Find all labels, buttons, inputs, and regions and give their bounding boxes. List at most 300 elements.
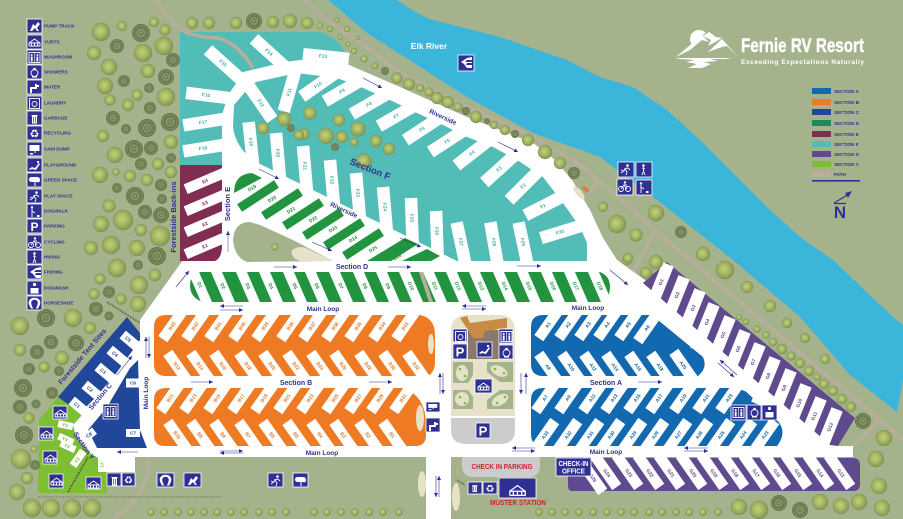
B stalls upper: B32 <box>410 361 421 372</box>
C stalls: C2 <box>85 385 94 394</box>
E stalls <box>184 166 231 259</box>
E stalls: E1 <box>201 243 209 251</box>
F stalls: F30 <box>555 228 565 237</box>
D labels: D14 <box>500 281 509 292</box>
legend item: parking: P <box>30 220 39 234</box>
D labels <box>195 281 604 292</box>
A stalls lower: A23 <box>761 430 771 441</box>
panel: Section C <box>58 317 147 448</box>
blue block <box>531 388 782 446</box>
B stalls upper: B22 <box>290 361 301 372</box>
F stalls: F13 <box>318 53 328 60</box>
B stalls upper: B14 <box>194 361 205 372</box>
G lower stalls: G23 <box>623 468 634 479</box>
legend item: pump track <box>27 19 75 33</box>
F stalls: F7 <box>392 112 401 121</box>
B stalls lower: B27 <box>354 393 364 404</box>
panel: Section D lower row <box>188 272 612 302</box>
B stalls upper: B24 <box>314 361 325 372</box>
legend item: washroom <box>27 50 72 64</box>
F stalls: F1 <box>539 203 547 211</box>
G stalls: G1 <box>658 278 666 286</box>
A stalls lower: A32 <box>564 430 574 441</box>
G lower stalls: G18 <box>729 468 740 479</box>
icon: pump track <box>184 473 201 487</box>
panel: Section G diagonal <box>643 262 855 457</box>
icon: showers east <box>747 405 761 420</box>
legend item: playground: PLAYGROUND <box>44 162 77 168</box>
F stalls: F24 <box>381 203 388 212</box>
G lower stalls: G26 <box>587 473 598 484</box>
legend item: fishing <box>27 265 63 279</box>
legend item: recycling: ♻ <box>30 128 39 140</box>
legend item: green space: GREEN SPACE <box>44 178 77 182</box>
F stalls: F17 <box>199 119 208 126</box>
icon: recycling office <box>483 482 497 495</box>
icon: yurt 3 <box>43 451 57 464</box>
B stalls lower: B10 <box>171 430 182 441</box>
section and road labels <box>58 108 622 461</box>
F stalls: F28 <box>490 238 497 247</box>
legend: section colours: SECTION A <box>834 89 860 94</box>
F stalls: F20 <box>274 149 281 158</box>
F stalls: F6 <box>418 125 427 134</box>
icon: water <box>426 418 440 432</box>
Y stalls: Y5 <box>61 422 69 429</box>
legend item: pump track: PUMP TRACK <box>44 24 75 28</box>
icon: parking centre: P <box>456 344 465 360</box>
purple area <box>643 262 855 446</box>
panel: Section A upper block <box>531 307 705 385</box>
gravel ovals <box>416 185 586 511</box>
F stalls: F9 <box>338 87 347 96</box>
B stalls lower: B4 <box>315 431 324 440</box>
orange building <box>460 316 507 338</box>
G stalls: G12 <box>826 422 835 433</box>
A stalls upper: A8 <box>543 363 552 372</box>
A stalls lower: A7 <box>541 394 550 403</box>
B stalls upper: B38 <box>286 321 296 332</box>
F stalls: F29 <box>519 237 526 247</box>
A stalls upper: A10 <box>565 362 576 373</box>
panel: Section G lower row <box>568 452 860 495</box>
icon: recycling west: ♻ <box>124 476 133 486</box>
B stalls upper: B35 <box>354 321 364 332</box>
legend: section colours: SECTION D <box>834 121 860 126</box>
A stalls upper: A6 <box>643 324 652 333</box>
B stalls lower: B23 <box>306 393 316 404</box>
icon: garbage office <box>468 482 482 494</box>
B stalls upper: B36 <box>331 321 341 332</box>
legend item: garbage <box>27 111 67 125</box>
A stalls upper: A12 <box>587 362 598 373</box>
maroon area <box>180 165 222 261</box>
B stalls lower: B6 <box>267 431 276 440</box>
legend item: hiking: HIKING <box>44 254 61 260</box>
icon: muster station <box>499 478 536 498</box>
G stalls: G4 <box>704 318 712 326</box>
logo tagline: Exceeding Expectations Naturally <box>741 59 864 66</box>
F stalls: F10 <box>313 81 324 90</box>
brown pad <box>468 330 499 359</box>
legend item: garbage: GARBAGE <box>44 116 67 120</box>
A stalls lower: A33 <box>541 430 551 441</box>
panel: central facility block <box>451 315 515 444</box>
green band <box>190 272 610 302</box>
legend item: laundry: LAUNDRY <box>44 100 66 106</box>
B stalls lower: B11 <box>166 393 176 404</box>
legend item: horseshoe <box>27 296 73 310</box>
inner teal area <box>233 73 587 261</box>
B stalls lower <box>156 380 418 453</box>
A stalls upper: A2 <box>564 321 573 330</box>
D labels: D17 <box>571 281 580 292</box>
G stalls: G11 <box>810 411 819 421</box>
logo reflection <box>675 58 732 68</box>
legend item: sani dump: SANI DUMP <box>44 146 70 152</box>
G lower stalls: G22 <box>644 468 655 479</box>
white D stalls <box>188 272 612 302</box>
legend: section colours: SECTION E <box>834 132 859 137</box>
B stalls lower: B9 <box>195 431 204 440</box>
icon: showers centre <box>499 345 513 359</box>
section and road labels: Section Y <box>71 431 95 461</box>
A stalls upper: A18 <box>654 362 665 373</box>
F stalls: F16 <box>201 92 211 99</box>
D19 to D26 labels: D23 <box>328 225 339 234</box>
C stalls: C4 <box>110 350 119 359</box>
section and road labels: Section C <box>88 382 114 412</box>
G stalls: G5 <box>720 331 728 339</box>
north arrow <box>834 191 852 222</box>
C stalls: C8 <box>85 431 94 440</box>
B stalls upper: B28 <box>362 361 373 372</box>
legend item: recycling: RECYCLING <box>44 130 71 136</box>
legend item: dogwalk <box>27 204 69 218</box>
G lower stalls: G13 <box>835 468 846 479</box>
A stalls lower: A25 <box>717 430 727 441</box>
F stalls: F4 <box>468 149 477 158</box>
B stalls lower: B19 <box>260 393 270 404</box>
G stalls: G6 <box>735 345 743 353</box>
section and road labels: Section E <box>223 187 232 221</box>
A stalls lower: A24 <box>739 430 749 441</box>
D labels: D15 <box>524 281 533 292</box>
E stalls: E3 <box>201 200 209 208</box>
icon: fishing in river <box>458 55 474 71</box>
check-in office sign: OFFICE <box>562 468 585 476</box>
C stalls <box>68 331 142 442</box>
B stalls upper: B30 <box>386 361 397 372</box>
logo <box>675 30 865 68</box>
E stalls: E2 <box>201 221 209 229</box>
icon: yurt 1 <box>53 406 67 419</box>
D19 to D26 labels: D24 <box>348 235 359 244</box>
section and road labels: Riverside <box>329 201 359 220</box>
icon: yurt 5 <box>86 477 101 489</box>
B stalls upper: B34 <box>378 321 388 332</box>
B stalls lower: B1 <box>387 431 396 440</box>
icon: parking lot: P <box>479 424 488 438</box>
icon: yurt centre <box>475 379 492 393</box>
legend item: water: WATER <box>44 84 61 90</box>
A stalls lower: A13 <box>610 393 620 404</box>
legend: section colours: SECTION G <box>834 152 860 157</box>
F stalls <box>182 34 587 269</box>
D labels: D1 <box>195 281 203 290</box>
D19 to D26 labels: D26 <box>392 253 403 262</box>
B stalls upper: B12 <box>171 361 182 372</box>
B stalls lower: B17 <box>237 393 247 404</box>
A stalls upper: A4 <box>603 321 612 330</box>
B stalls lower: B25 <box>331 393 341 404</box>
A stalls upper: A14 <box>609 362 620 373</box>
legend item: showers <box>27 65 68 79</box>
icon: hiking trail <box>636 162 652 177</box>
logo title: Fernie RV Resort <box>741 36 865 57</box>
D labels: D2 <box>218 282 226 291</box>
F stalls: F23 <box>354 189 361 198</box>
legend item: water <box>27 80 61 94</box>
island inside the forestside loop <box>233 222 333 262</box>
F stalls: F3 <box>495 165 504 174</box>
B stalls upper: B41 <box>214 321 224 332</box>
Y stalls: Y4 <box>61 436 69 444</box>
D labels: D16 <box>548 281 557 292</box>
B stalls upper: B42 <box>191 321 201 332</box>
G stalls: G7 <box>750 358 758 366</box>
icon: green space south <box>293 473 308 487</box>
icon: parking lot <box>476 423 490 438</box>
icon: dogwash east <box>762 405 777 420</box>
legend item: yurts: YURTS <box>44 40 60 44</box>
panel: Section B lower block <box>154 380 426 453</box>
F stalls: F11 <box>286 87 294 97</box>
muster station label: MUSTER STATION <box>490 500 546 507</box>
G stalls: G2 <box>674 291 682 299</box>
G lower stalls: G21 <box>665 468 676 479</box>
C stalls: C7 <box>130 431 136 437</box>
D labels: D6 <box>312 282 320 291</box>
Elk River <box>328 0 903 412</box>
D labels: D13 <box>476 281 485 292</box>
icon: washroom east <box>731 405 746 420</box>
F stalls: F2 <box>519 182 528 191</box>
icon: laundry centre <box>453 329 467 342</box>
D19 to D26 labels: D22 <box>308 215 319 224</box>
D19 to D26 labels: D21 <box>286 206 297 215</box>
icon: playground centre <box>477 342 492 357</box>
icon: recycling office: ♻ <box>486 484 495 495</box>
D19 to D26 labels: D25 <box>368 245 379 254</box>
garden patches <box>453 362 513 409</box>
A stalls lower: A26 <box>695 430 705 441</box>
D labels: D8 <box>360 282 368 291</box>
B stalls upper: B20 <box>266 361 277 372</box>
panel: Section E <box>180 165 231 261</box>
icon: yurt 4 <box>49 474 63 488</box>
A stalls lower: A17 <box>655 393 665 404</box>
legend item: parking <box>27 219 65 234</box>
path over Section F <box>157 0 253 68</box>
dashed hedge through Section Y <box>68 457 88 492</box>
F stalls: F19 <box>247 138 254 147</box>
G lower stalls: G24 <box>601 468 612 479</box>
icon: washroom centre <box>499 329 513 343</box>
road direction arrows <box>117 78 737 497</box>
legend item: dogwalk: DOGWALK <box>44 208 69 214</box>
A stalls upper: A16 <box>632 362 643 373</box>
F stalls: F27 <box>457 237 464 247</box>
D labels: D11 <box>430 281 439 292</box>
Y stalls: Y2 <box>73 456 82 465</box>
F stalls: F8 <box>365 100 374 109</box>
G lower stalls: G14 <box>814 468 825 479</box>
section and road labels: Forestside Back-ins <box>169 181 178 253</box>
G stalls: G10 <box>795 398 804 409</box>
B stalls lower: B7 <box>243 431 252 440</box>
legend: section colours: SECTION B <box>834 100 860 105</box>
G lower stalls: G16 <box>771 468 782 479</box>
D labels: D12 <box>453 281 462 292</box>
B stalls upper: B37 <box>308 321 318 332</box>
icon: sani dump <box>426 402 440 412</box>
icon: section C washroom <box>103 404 118 419</box>
C stalls: C6 <box>130 381 136 387</box>
G stalls: G9 <box>781 384 789 392</box>
A stalls lower: A9 <box>564 394 573 403</box>
B stalls upper: B39 <box>261 321 271 332</box>
blue block <box>531 315 705 376</box>
icon: horseshoe pit <box>157 473 174 487</box>
logo mountains <box>690 30 735 54</box>
A stalls upper: A20 <box>677 360 688 371</box>
A stalls lower: A11 <box>588 393 598 404</box>
B stalls lower: B15 <box>213 393 223 404</box>
Y stalls <box>57 420 106 472</box>
legend item: play space <box>27 189 73 203</box>
lime area <box>38 397 107 493</box>
legend item: sani dump <box>27 142 70 156</box>
icon: play space trail <box>618 162 634 177</box>
F stalls: F21 <box>301 162 308 171</box>
orange marker near trail <box>582 186 589 193</box>
panel: Section B upper block <box>154 308 435 384</box>
A stalls lower <box>528 380 779 456</box>
D labels: D5 <box>290 282 298 291</box>
D labels: D9 <box>383 282 391 291</box>
check-in office sign <box>556 458 591 476</box>
icon: parking centre <box>453 344 467 360</box>
F stalls: F25 <box>408 214 414 223</box>
hedges <box>38 302 465 497</box>
beige plaza <box>451 315 515 416</box>
section and road labels: Section D <box>336 264 368 271</box>
D labels: D18 <box>595 281 604 292</box>
legend item: laundry <box>27 96 66 110</box>
legend item: cycling <box>27 235 65 249</box>
legend item: dogwash: DOGWASH <box>44 286 69 290</box>
logo sun <box>690 30 708 48</box>
G stalls: G8 <box>765 372 773 380</box>
D labels: D3 <box>243 282 251 291</box>
legend: section colours <box>812 88 860 182</box>
B stalls lower: B29 <box>376 393 386 404</box>
F stalls: F14 <box>263 48 274 58</box>
legend item: dogwash <box>27 281 69 295</box>
B stalls lower: B13 <box>189 393 199 404</box>
legend item: play space: PLAY SPACE <box>44 194 73 198</box>
A stalls lower: A28 <box>651 430 661 441</box>
outer teal area <box>180 32 347 165</box>
A stalls upper: A3 <box>584 321 593 330</box>
section and road labels: Main Loop <box>307 306 339 313</box>
A stalls upper <box>534 307 698 385</box>
section and road labels: Section F <box>348 157 392 183</box>
legend: section colours: SECTION Y <box>834 162 859 167</box>
A stalls upper: A5 <box>624 321 633 330</box>
A stalls lower: A21 <box>702 393 712 404</box>
panel: Section A lower block <box>528 380 782 456</box>
orange block <box>154 315 435 376</box>
panel: Section Y <box>38 397 107 493</box>
G lower stalls: G15 <box>792 468 803 479</box>
D labels: D7 <box>336 282 344 291</box>
F stalls: F22 <box>328 176 335 185</box>
B stalls upper: B16 <box>217 361 228 372</box>
B stalls lower: B2 <box>363 431 372 440</box>
C stalls: C5 <box>123 335 132 344</box>
section and road labels: Main Loop <box>572 305 604 312</box>
beige path crossing <box>419 272 433 302</box>
icon: recycling west <box>122 473 135 486</box>
F stalls: F5 <box>443 137 452 146</box>
legend: amenities <box>27 19 77 310</box>
C stalls: C3 <box>98 367 107 376</box>
D19 to D26 labels <box>247 184 403 262</box>
C stalls: C1 <box>72 401 81 410</box>
panel: Section D upper row <box>234 173 440 262</box>
legend: section colours: PATH <box>834 172 847 177</box>
check-in office sign: CHECK-IN <box>558 461 588 468</box>
icon: play space south <box>268 473 283 487</box>
purple strip <box>568 458 860 491</box>
B stalls upper <box>158 308 431 384</box>
D19 to D26 labels: D19 <box>247 184 258 193</box>
D labels: D10 <box>406 281 415 292</box>
B stalls lower: B21 <box>283 393 293 404</box>
G stalls: G3 <box>690 304 698 312</box>
B stalls lower: B5 <box>291 431 300 440</box>
icon: cycling trail <box>617 179 633 195</box>
legend item: yurts <box>27 35 60 49</box>
section and road labels: Main Loop <box>306 450 338 457</box>
check in parking pad <box>462 457 540 477</box>
A stalls lower: A23 <box>725 393 735 404</box>
D19 to D26 labels: D20 <box>267 195 278 204</box>
navy lower area <box>88 360 147 448</box>
legend item: hiking <box>27 250 61 264</box>
legend item: parking: PARKING <box>44 224 65 228</box>
Y stalls: Y1 <box>98 462 104 468</box>
A stalls lower: A30 <box>607 430 617 441</box>
B stalls upper: B43 <box>168 321 178 332</box>
A stalls lower: A15 <box>633 393 643 404</box>
F stalls: F15 <box>217 59 228 69</box>
check in parking label: CHECK IN PARKING <box>472 464 533 471</box>
D19 to D26 stripes <box>234 173 440 261</box>
legend item: washroom: WASHROOM <box>44 54 72 60</box>
